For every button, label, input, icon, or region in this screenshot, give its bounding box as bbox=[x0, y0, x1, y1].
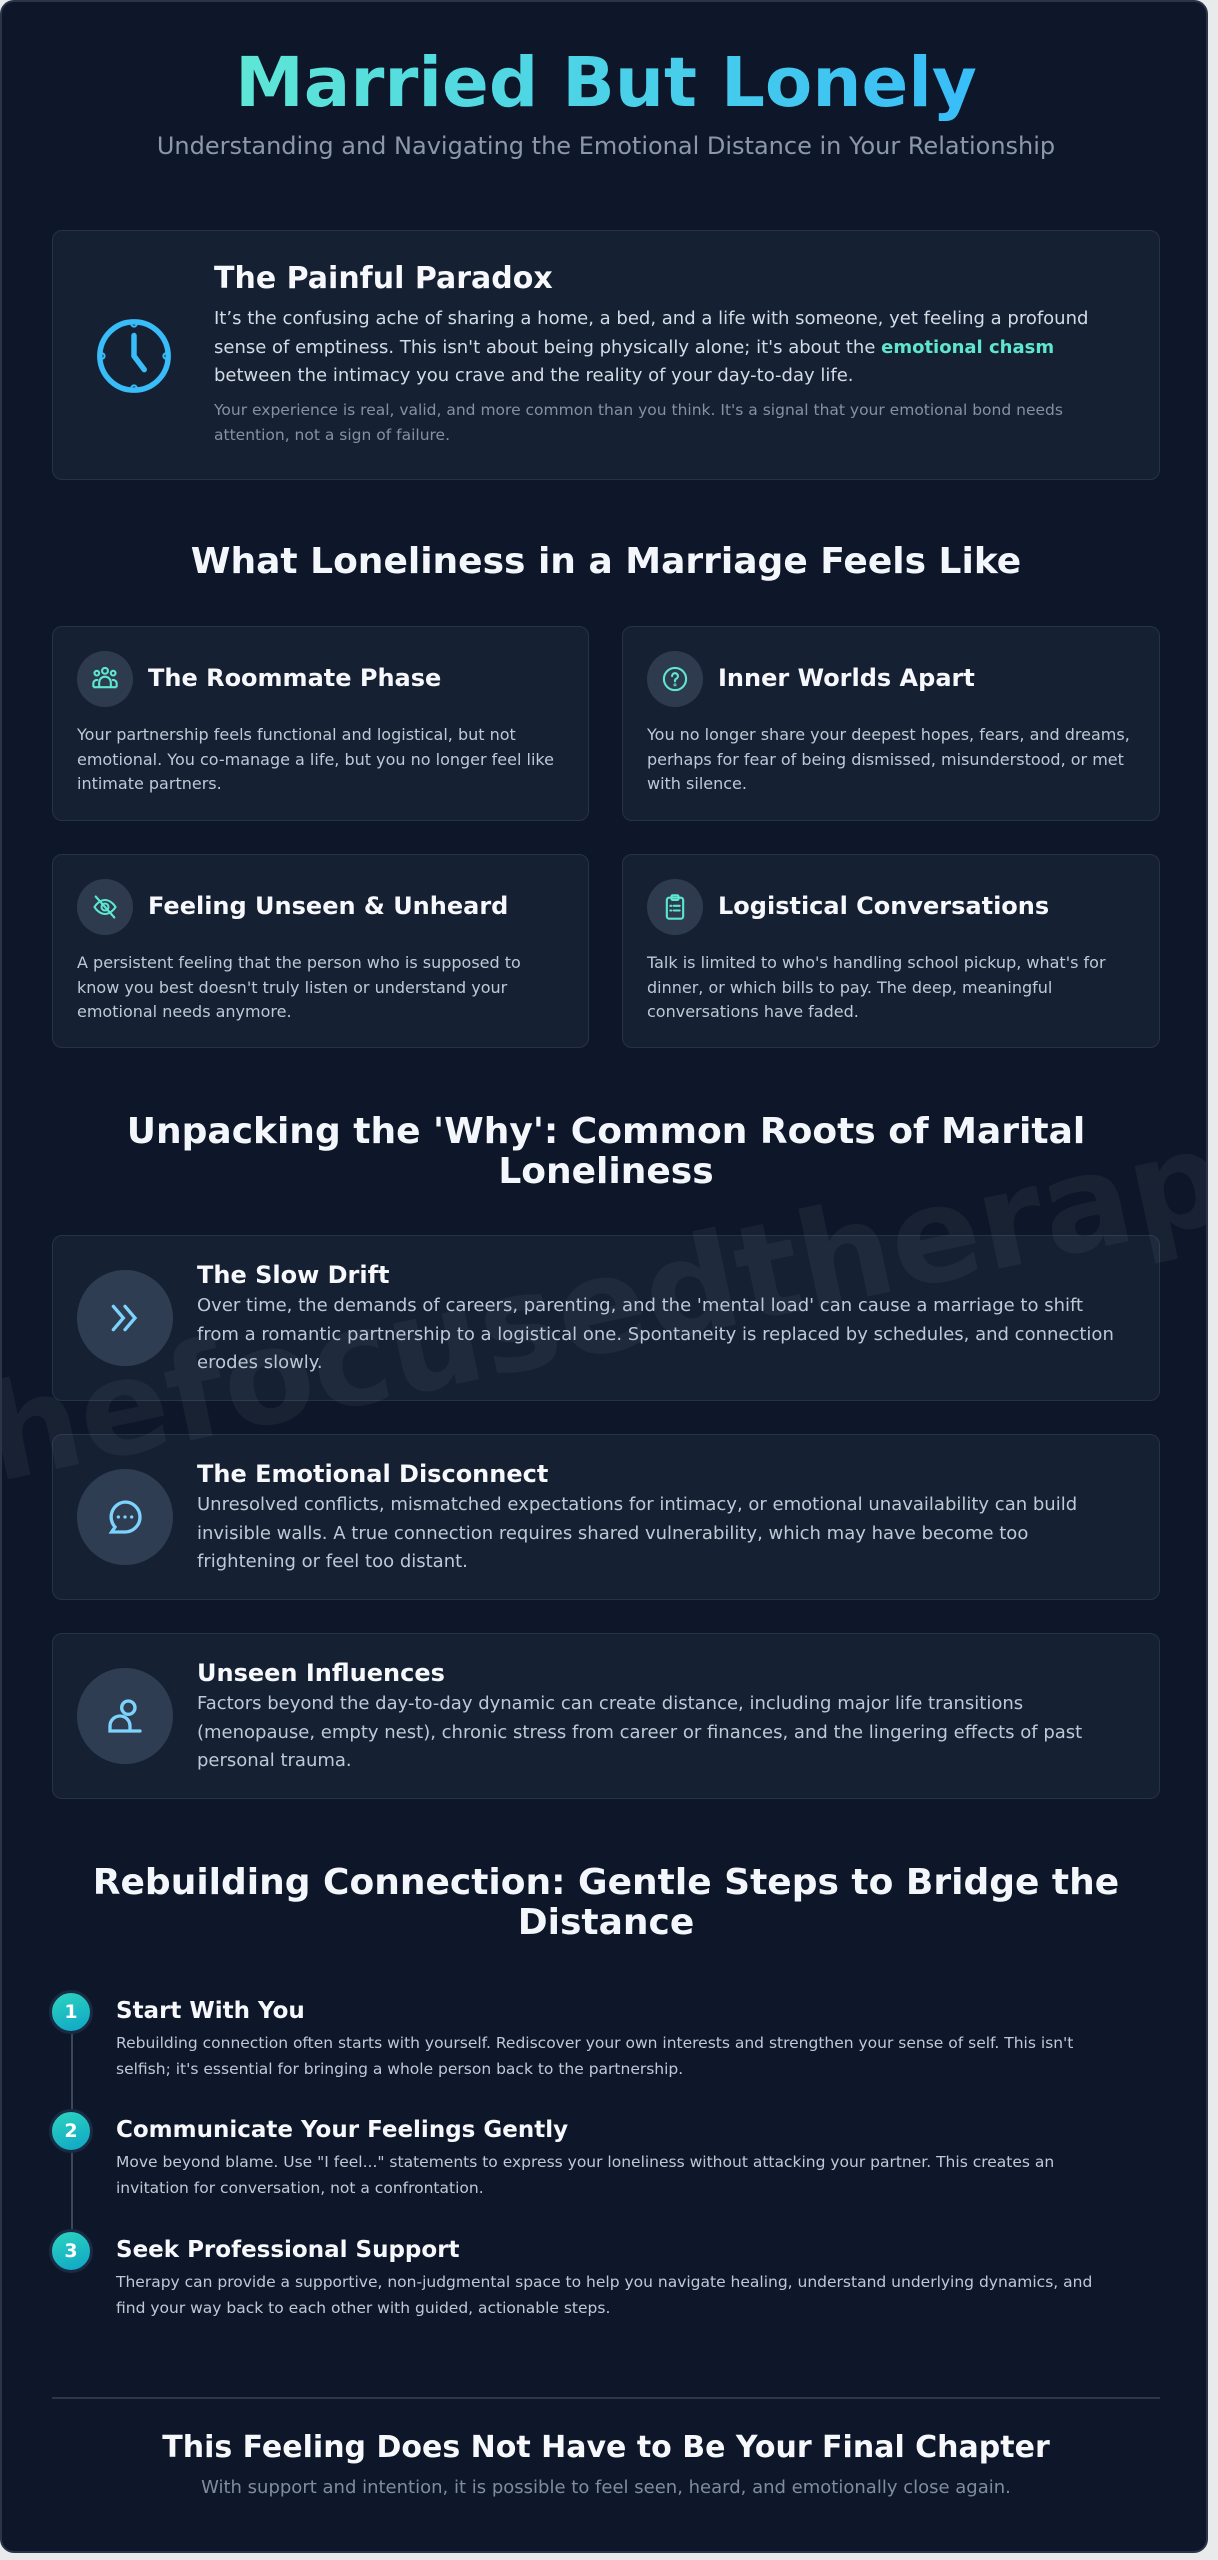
step 1: Start With You bbox=[116, 1998, 305, 2024]
icon: person bbox=[77, 1668, 173, 1764]
icon: people bbox=[77, 651, 133, 707]
cause text: Over time, the demands of careers, parenting, and the 'mental load' can cause a marriage to shift from a romantic partnership to a logistical one. Spontaneity is replaced by schedules, and connection erodes slowly. bbox=[197, 1295, 1114, 1373]
step 1 bbox=[49, 1990, 1073, 2078]
step 3: Seek Professional Support bbox=[116, 2237, 460, 2263]
panel: unseen unheard bbox=[52, 854, 589, 1048]
icon: eye off bbox=[77, 879, 133, 935]
card text: Talk is limited to who's handling school pickup, what's for dinner, or which bills to pay. The deep, meaningful conversations have faded. bbox=[647, 953, 1106, 1021]
timeline line bbox=[71, 2014, 73, 2250]
closing heading: This Feeling Does Not Have to Be Your Final Chapter bbox=[162, 2430, 1050, 2465]
step 2: Communicate Your Feelings Gently bbox=[116, 2117, 568, 2143]
step 3 bbox=[49, 2229, 1092, 2317]
closing text: With support and intention, it is possible to feel seen, heard, and emotionally close again. bbox=[201, 2477, 1011, 2498]
cause title: Unseen Influences bbox=[197, 1659, 445, 1687]
cause title: The Slow Drift bbox=[197, 1261, 390, 1289]
cause text: Unresolved conflicts, mismatched expectations for intimacy, or emotional unavailability can build invisible walls. A true connection requires shared vulnerability, which may have become too frightening or feel too distant. bbox=[197, 1494, 1077, 1572]
panel: roommate phase bbox=[52, 626, 589, 821]
heading: painful paradox: The Painful Paradox bbox=[214, 261, 553, 296]
step 3: 3 bbox=[64, 2240, 78, 2262]
card title: Feeling Unseen & Unheard bbox=[148, 892, 508, 920]
subtitle: Understanding and Navigating the Emotional Distance in Your Relationship bbox=[157, 132, 1055, 160]
cause title: The Emotional Disconnect bbox=[197, 1460, 548, 1488]
text: Rebuilding connection often starts with yourself. Rediscover your own interests and strengthen your sense of self. This isn't selfish; it's essential for bringing a whole person back to the partnership. bbox=[116, 2034, 1073, 2078]
heading: unpacking the why: Unpacking the 'Why': Common Roots of Marital Loneliness bbox=[127, 1111, 1085, 1192]
icon: chevrons bbox=[77, 1270, 173, 1366]
step 2 bbox=[49, 2109, 1054, 2197]
icon: clock bbox=[97, 319, 171, 393]
step 1: 1 bbox=[64, 2001, 78, 2023]
text: Therapy can provide a supportive, non-judgmental space to help you navigate healing, understand underlying dynamics, and find your way back to each other with guided, actionable steps. bbox=[116, 2273, 1092, 2317]
card text: A persistent feeling that the person who is supposed to know you best doesn't truly listen or understand your emotional needs anymore. bbox=[77, 953, 521, 1021]
card text: You no longer share your deepest hopes, fears, and dreams, perhaps for fear of being dismissed, misunderstood, or met with silence. bbox=[647, 725, 1130, 793]
panel: slow drift bbox=[52, 1235, 1160, 1401]
panel: emotional disconnect bbox=[52, 1434, 1160, 1600]
card title: The Roommate Phase bbox=[148, 664, 441, 692]
card text: Your partnership feels functional and logistical, but not emotional. You co-manage a life, but you no longer feel like intimate partners. bbox=[77, 725, 554, 793]
icon: chat bubble bbox=[77, 1469, 173, 1565]
panel: logistical conversations bbox=[622, 854, 1160, 1048]
panel: unseen influences bbox=[52, 1633, 1160, 1799]
cause text: Factors beyond the day-to-day dynamic can create distance, including major life transitions (menopause, empty nest), chronic stress from career or finances, and the lingering effects of past personal trauma. bbox=[197, 1693, 1082, 1771]
text block: reassurance: Your experience is real, valid, and more common than you think. It's a signal that your emotional bond needs attention, not a sign of failure. bbox=[214, 401, 1063, 444]
heading: what loneliness feels like: What Loneliness in a Marriage Feels Like bbox=[191, 541, 1021, 582]
heading: rebuilding connection: Rebuilding Connection: Gentle Steps to Bridge the Distance bbox=[93, 1862, 1119, 1943]
text block: paradox body: It’s the confusing ache of sharing a home, a bed, and a life with someone, yet feeling a profound sense of emptiness. This isn't about being physically alone; it's about the emotional chasm between the intimacy you crave and the reality of your day-to-day life. bbox=[214, 308, 1088, 386]
icon: question bbox=[647, 651, 703, 707]
panel: painful paradox bbox=[52, 230, 1160, 480]
card title: Inner Worlds Apart bbox=[718, 664, 975, 692]
panel: inner worlds apart bbox=[622, 626, 1160, 821]
text: Move beyond blame. Use "I feel..." statements to express your loneliness without attacking your partner. This creates an invitation for conversation, not a confrontation. bbox=[116, 2153, 1054, 2197]
step 2: 2 bbox=[64, 2120, 78, 2142]
title: Married But Lonely bbox=[235, 43, 977, 123]
icon: clipboard bbox=[647, 879, 703, 935]
card title: Logistical Conversations bbox=[718, 892, 1049, 920]
